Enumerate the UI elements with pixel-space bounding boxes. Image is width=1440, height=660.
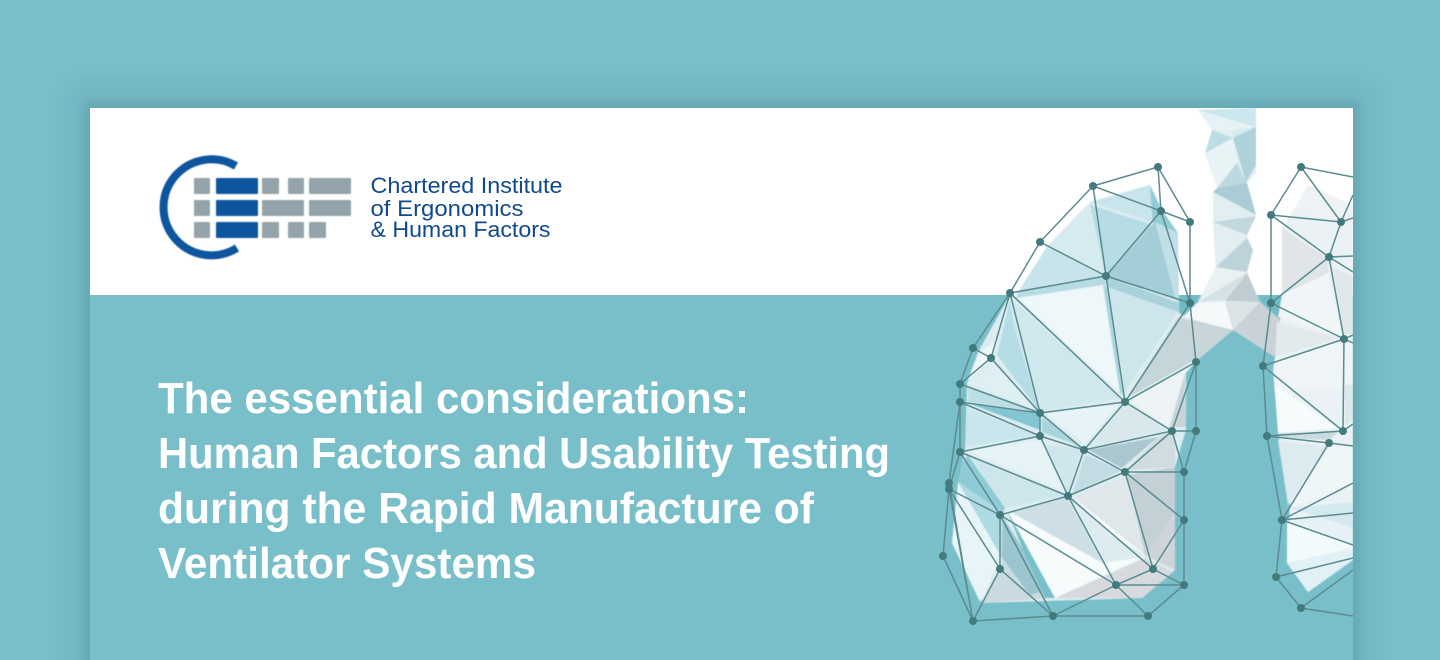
trachea and bronchi xyxy=(1180,108,1282,370)
left lung wireframe xyxy=(939,163,1200,625)
right lung wireframe xyxy=(1259,163,1353,616)
title: Human Factors and Usability Testing xyxy=(158,429,890,478)
wire edges xyxy=(1263,167,1353,616)
illustration: polygon lungs xyxy=(939,108,1353,625)
logo grid xyxy=(194,178,351,238)
logo wordmark xyxy=(370,173,562,242)
title: during the Rapid Manufacture of xyxy=(158,484,814,533)
wire edges xyxy=(943,167,1196,621)
logo wordmark: & Human Factors xyxy=(370,217,550,242)
left lung facets xyxy=(952,185,1195,603)
right lung facets xyxy=(1273,185,1353,592)
title: Ventilator Systems xyxy=(158,539,536,588)
title xyxy=(158,374,890,588)
wire nodes xyxy=(1259,163,1348,612)
card panel xyxy=(90,108,1353,660)
logo wordmark: Chartered Institute xyxy=(370,173,562,198)
logo wordmark: of Ergonomics xyxy=(370,196,524,221)
title: The essential considerations: xyxy=(158,374,749,423)
logo xyxy=(164,159,562,255)
logo ring xyxy=(164,159,237,255)
wire nodes xyxy=(939,163,1200,625)
